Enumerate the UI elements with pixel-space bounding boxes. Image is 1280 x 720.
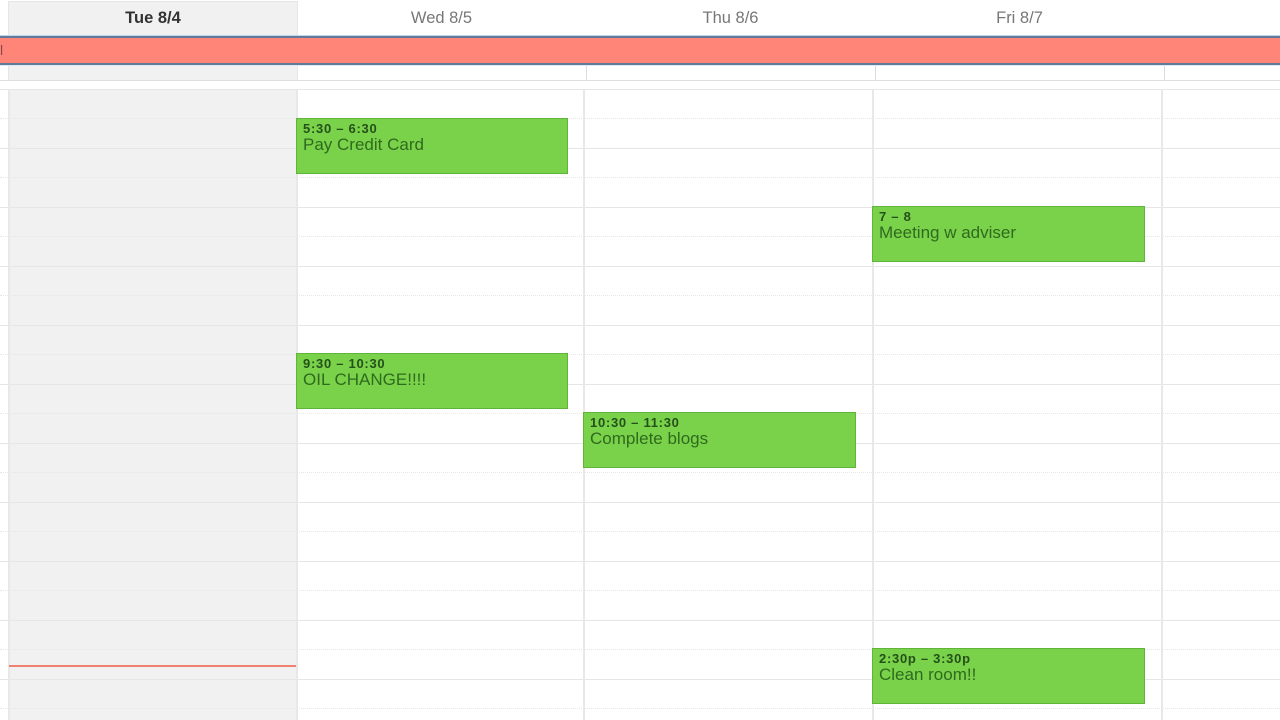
event: Clean room!!: 2:30p – 3:30p — [879, 651, 971, 666]
all-day event banner: l — [0, 42, 3, 58]
event: OIL CHANGE!!!! — [296, 353, 568, 409]
heading: Fri 8/7: Fri 8/7 — [996, 9, 1043, 27]
event: OIL CHANGE!!!!: 9:30 – 10:30 — [303, 356, 385, 371]
event: Pay Credit Card — [296, 118, 568, 174]
current time indicator — [9, 665, 296, 667]
heading: Wed 8/5: Wed 8/5 — [411, 9, 472, 27]
event: Meeting w adviser: 7 – 8 — [879, 209, 912, 224]
event: Clean room!! — [872, 648, 1145, 704]
event: Complete blogs — [583, 412, 856, 468]
event: Complete blogs: Complete blogs — [590, 429, 708, 448]
heading: Thu 8/6: Thu 8/6 — [703, 9, 758, 27]
event: OIL CHANGE!!!!: OIL CHANGE!!!! — [303, 370, 426, 389]
event: Pay Credit Card: 5:30 – 6:30 — [303, 121, 377, 136]
heading: Tue 8/4: Tue 8/4 — [125, 9, 181, 27]
event: Pay Credit Card: Pay Credit Card — [303, 135, 424, 154]
event: Meeting w adviser — [872, 206, 1145, 262]
event: Clean room!!: Clean room!! — [879, 665, 976, 684]
event: Complete blogs: 10:30 – 11:30 — [590, 415, 680, 430]
event: Meeting w adviser: Meeting w adviser — [879, 223, 1016, 242]
today column background — [8, 89, 297, 720]
today column header background — [8, 1, 298, 80]
all-day event banner — [0, 36, 1280, 65]
